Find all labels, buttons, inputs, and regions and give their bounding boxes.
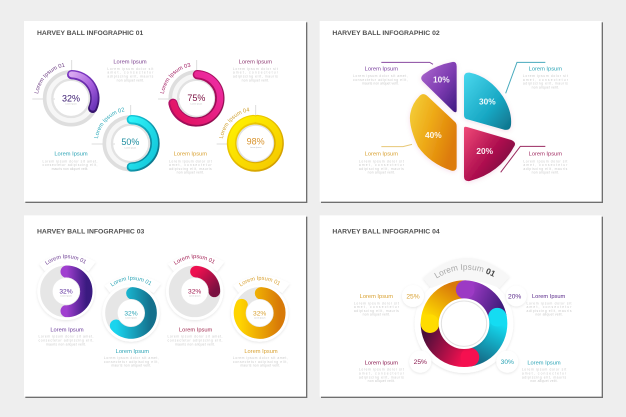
text block: top right: amet, consectetur <box>233 71 279 75</box>
ring 50% cyan: Lorem Ipsum 02 <box>94 108 124 138</box>
badge 30% teal <box>496 351 518 373</box>
text block: teal: Lorem Ipsum <box>529 67 563 73</box>
text block 3: consectetur adipiscing elit, <box>167 339 223 343</box>
donut 3 crimson: Lorem Ipsum <box>189 295 201 298</box>
donut 4 amber: Lorem Ipsum <box>254 316 266 319</box>
badge 20% purple <box>506 286 527 306</box>
donut 3 crimson: 32% <box>188 289 201 296</box>
text block 4: Lorem Ipsum <box>244 349 278 355</box>
heading 02: HARVEY BALL INFOGRAPHIC 02 <box>332 30 440 37</box>
text block: crimson <box>359 360 405 383</box>
text block: top left: Lorem Ipsum <box>113 60 147 66</box>
ring 32% purple <box>32 60 100 126</box>
text block: teal: amet, consectetur <box>523 78 569 82</box>
ring 75% magenta: 75% <box>187 93 205 103</box>
text block: bottom middle: Lorem ipsum dolor sit <box>169 159 212 163</box>
badge 25% crimson <box>409 351 431 373</box>
badge 25% amber: 25% <box>406 293 420 300</box>
donut 4 amber: 32% <box>253 310 266 317</box>
text block: bottom left: Lorem ipsum dolor sit amet, <box>42 159 98 163</box>
text block: teal: adipiscing elit, mauris <box>523 82 568 86</box>
text block: teal: adipiscing elit, mauris <box>522 375 566 379</box>
text block: purple <box>526 294 572 317</box>
text block: top right: non aliquet velit. <box>242 78 269 82</box>
text block: top right: Lorem ipsum dolor sit <box>233 67 278 71</box>
text block 1: Lorem Ipsum <box>50 328 84 334</box>
text block: crimson: adipiscing elit, mauris <box>359 375 404 379</box>
text block: teal: non aliquet velit. <box>530 379 558 383</box>
panel: Harvey Ball Infographic 01 <box>24 21 308 203</box>
text block: amber: amet, consectetur <box>359 163 405 167</box>
text block: amber: non aliquet velit. <box>363 313 390 317</box>
text block 2: consectetur adipiscing elit, <box>104 360 159 364</box>
donut 4 amber <box>230 276 289 343</box>
ring 98% yellow: Lorem Ipsum 04 <box>219 108 250 138</box>
text block: amber: non aliquet velit. <box>368 171 395 175</box>
ring 32% purple: Lorem Ipsum <box>65 102 77 105</box>
text block: bottom left: Lorem Ipsum <box>54 152 88 158</box>
text block: crimson: amet, consectetur <box>359 371 405 375</box>
text block: purple: amet, consectetur <box>526 305 572 309</box>
donut 2 teal: Lorem Ipsum 01 <box>110 276 152 286</box>
text block: crimson: adipiscing elit, mauris <box>523 167 568 171</box>
panel: Harvey Ball Infographic 04 <box>320 216 603 398</box>
text block 4 <box>233 349 288 368</box>
donut 2 teal: Lorem Ipsum <box>125 316 137 319</box>
text block: top right: adipiscing elit, mauris <box>233 75 278 79</box>
ring 98% yellow: 98% <box>247 137 265 147</box>
heading 03: HARVEY BALL INFOGRAPHIC 03 <box>37 228 145 235</box>
text block 3: Lorem Ipsum <box>179 328 213 334</box>
text block: bottom middle: adipiscing elit, mauris <box>169 167 212 171</box>
text block: amber: Lorem Ipsum <box>365 152 399 158</box>
text block: crimson: Lorem Ipsum <box>365 360 399 366</box>
text block: purple: Lorem ipsum dolor sit <box>526 301 572 305</box>
donut 1 purple <box>37 254 95 322</box>
text block: bottom middle: amet, consectetur <box>169 163 213 167</box>
pie slice 20% crimson: 20% <box>476 146 494 156</box>
badge 30% teal: 30% <box>501 359 514 366</box>
text block: bottom left: consectetur adipiscing elit, <box>42 163 98 167</box>
donut 1 purple: Lorem Ipsum <box>60 295 72 298</box>
text block: crimson: Lorem ipsum dolor sit <box>359 368 404 372</box>
text block: top right <box>233 60 279 82</box>
text block: top left: non aliquet velit. <box>117 78 144 82</box>
text block: purple: Lorem ipsum dolor sit amet, <box>353 74 408 78</box>
text block: teal: Lorem Ipsum <box>527 360 561 366</box>
ring 98% yellow <box>216 105 284 172</box>
ring 75% magenta <box>158 60 225 127</box>
text block 4: mauris non aliquet velit. <box>240 364 280 368</box>
text block: crimson: Lorem Ipsum <box>529 152 563 158</box>
text block: amber: adipiscing elit, mauris <box>354 309 399 313</box>
text block 2: Lorem ipsum dolor sit amet, <box>104 356 159 360</box>
text block: amber: amet, consectetur <box>354 305 400 309</box>
ring 32% purple: 32% <box>62 93 80 103</box>
donut 2 teal <box>102 276 160 343</box>
text block: crimson <box>523 152 568 175</box>
text block 1 <box>38 328 94 346</box>
ring 32% purple: Lorem Ipsum 01 <box>34 63 65 94</box>
text block: purple <box>353 67 408 86</box>
pie slice 40% amber: 40% <box>425 130 442 140</box>
text block: teal <box>523 67 569 89</box>
text block 1: mauris non aliquet velit. <box>46 342 86 346</box>
ring 50% cyan <box>92 105 160 172</box>
badge 25% amber <box>402 285 424 307</box>
text block: top left: adipiscing elit, mauris <box>107 75 154 79</box>
donut 3 crimson: Lorem Ipsum 01 <box>174 254 214 265</box>
badge 25% crimson: 25% <box>414 359 427 366</box>
text block: purple: non aliquet velit. <box>535 313 563 317</box>
text block: crimson: amet, consectetur <box>523 163 568 167</box>
text block: teal: Lorem ipsum dolor sit <box>523 74 568 78</box>
text block: purple: consectetur adipiscing elit, <box>353 78 408 82</box>
donut 1 purple: Lorem Ipsum 01 <box>44 254 86 265</box>
text block: purple: mauris non aliquet velit. <box>362 82 399 86</box>
badge 20% purple: 20% <box>508 293 521 300</box>
donut 2 teal: 32% <box>124 310 138 317</box>
text block 3: Lorem ipsum dolor sit amet, <box>167 335 223 339</box>
text block: crimson: non aliquet velit. <box>532 171 559 175</box>
text block: amber: Lorem Ipsum <box>360 294 394 300</box>
pie slice 20% crimson <box>464 127 515 181</box>
ring 98% yellow: Lorem Ipsum <box>250 146 262 149</box>
text block 4: Lorem ipsum dolor sit amet, <box>233 356 288 360</box>
pie slice 30% teal: 30% <box>479 97 496 107</box>
pie slice 10% purple <box>421 62 457 112</box>
text block: bottom left: mauris non aliquet velit. <box>52 167 88 171</box>
text block: amber: Lorem ipsum dolor sit <box>354 301 399 305</box>
text block: purple: Lorem Ipsum <box>532 294 566 300</box>
text block: amber <box>354 294 400 317</box>
text block: bottom middle <box>169 152 213 175</box>
text block: crimson: Lorem ipsum dolor sit <box>523 159 567 163</box>
text block: top left <box>107 60 154 82</box>
panel: Harvey Ball Infographic 02 <box>320 21 603 203</box>
text block 3: mauris non aliquet velit. <box>175 342 215 346</box>
text block: bottom middle: Lorem Ipsum <box>174 152 208 158</box>
text block 3 <box>167 328 223 346</box>
segmented donut with banner <box>414 258 514 374</box>
text block: teal <box>522 360 567 383</box>
text block: bottom middle: non aliquet velit. <box>177 171 204 175</box>
text block: top right: Lorem Ipsum <box>239 60 273 66</box>
donut 4 amber: Lorem Ipsum 01 <box>238 276 280 286</box>
ring 75% magenta: Lorem Ipsum <box>191 102 202 105</box>
text block: top left: Lorem ipsum dolor sit <box>107 67 153 71</box>
text block: amber: adipiscing elit, mauris <box>359 167 404 171</box>
donut 3 crimson <box>166 254 224 322</box>
text block: amber <box>359 152 405 175</box>
ring 50% cyan: Lorem Ipsum <box>125 146 136 149</box>
text block: teal: amet, consectetur <box>522 371 567 375</box>
donut 1 purple: 32% <box>59 289 73 296</box>
text block 2: Lorem Ipsum <box>116 349 150 355</box>
text block 2: mauris non aliquet velit. <box>111 364 151 368</box>
text block 1: consectetur adipiscing elit, <box>38 339 94 343</box>
text block 2 <box>104 349 159 368</box>
text block: teal: Lorem ipsum dolor sit <box>522 368 566 372</box>
pie slice 40% amber <box>410 94 457 171</box>
text block 1: Lorem ipsum dolor sit amet, <box>38 335 94 339</box>
text block: bottom left <box>42 152 98 171</box>
pie slice 30% teal <box>464 73 511 130</box>
text block: teal: non aliquet velit. <box>532 85 559 89</box>
ring 50% cyan: 50% <box>121 137 139 147</box>
leader lines <box>381 62 545 172</box>
text block: crimson: non aliquet velit. <box>368 379 395 383</box>
panel: Harvey Ball Infographic 03 <box>24 216 308 398</box>
text block: top left: amet, consectetur <box>107 71 154 75</box>
heading 01: HARVEY BALL INFOGRAPHIC 01 <box>37 30 144 37</box>
pie slice 10% purple: 10% <box>433 74 450 84</box>
text block: purple: adipiscing elit, mauris <box>526 309 572 313</box>
text block: amber: Lorem ipsum dolor sit <box>359 159 404 163</box>
segmented donut with banner: Lorem Ipsum 01 <box>434 264 495 278</box>
text block: purple: Lorem Ipsum <box>365 67 399 73</box>
heading 04: HARVEY BALL INFOGRAPHIC 04 <box>332 228 440 235</box>
ring 75% magenta: Lorem Ipsum 03 <box>160 63 190 94</box>
text block 4: consectetur adipiscing elit, <box>233 360 288 364</box>
